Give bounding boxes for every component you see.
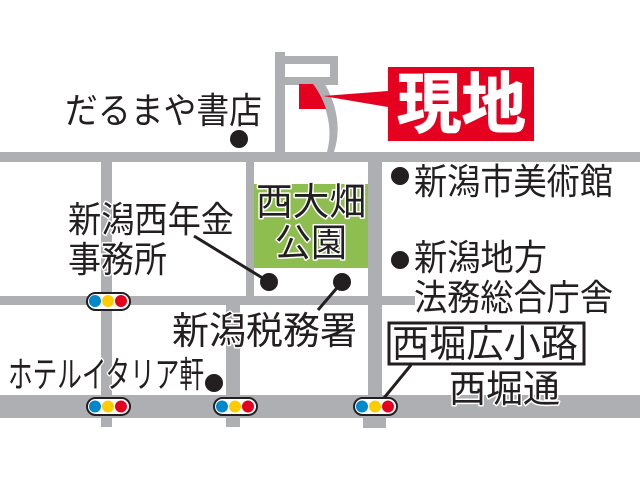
- label: Nishi-Ohata park: [256, 182, 366, 265]
- label: Niigata district legal office: [414, 237, 613, 318]
- label: Nishi-Ohata park: 西大畑: [256, 182, 366, 224]
- label: Niigata west pension office: [68, 199, 234, 280]
- current location marker: [299, 84, 388, 109]
- label: Niigata district legal office: 新潟地方: [414, 237, 547, 278]
- label: Niigata district legal office: 法務総合庁舎: [414, 277, 613, 318]
- park: green area: [254, 184, 368, 268]
- traffic light 4: [354, 398, 397, 415]
- label: Nishibori-hirokoji boxed: 西堀広小路: [392, 324, 578, 366]
- leader lines: [194, 236, 411, 398]
- traffic light 3: [214, 398, 257, 415]
- traffic light 1: [87, 293, 130, 310]
- traffic light 2: [87, 398, 130, 415]
- label: Darumaya bookstore: だるまや書店: [65, 90, 262, 131]
- label: Nishibori street: 西堀通: [449, 369, 560, 411]
- label: Hotel Italia-ken: ホテルイタリア軒: [8, 354, 204, 395]
- label: Niigata City Art Museum: 新潟市美術館: [414, 161, 613, 202]
- label: Niigata west pension office: 事務所: [68, 239, 167, 280]
- label: Nishi-Ohata park: 公園: [275, 223, 347, 265]
- callout: current location: 現地: [397, 67, 526, 141]
- label: Niigata tax office: 新潟税務署: [172, 311, 357, 353]
- label: Niigata west pension office: 新潟西年金: [68, 199, 234, 240]
- landmark dots: [205, 130, 409, 392]
- road network: [0, 52, 640, 428]
